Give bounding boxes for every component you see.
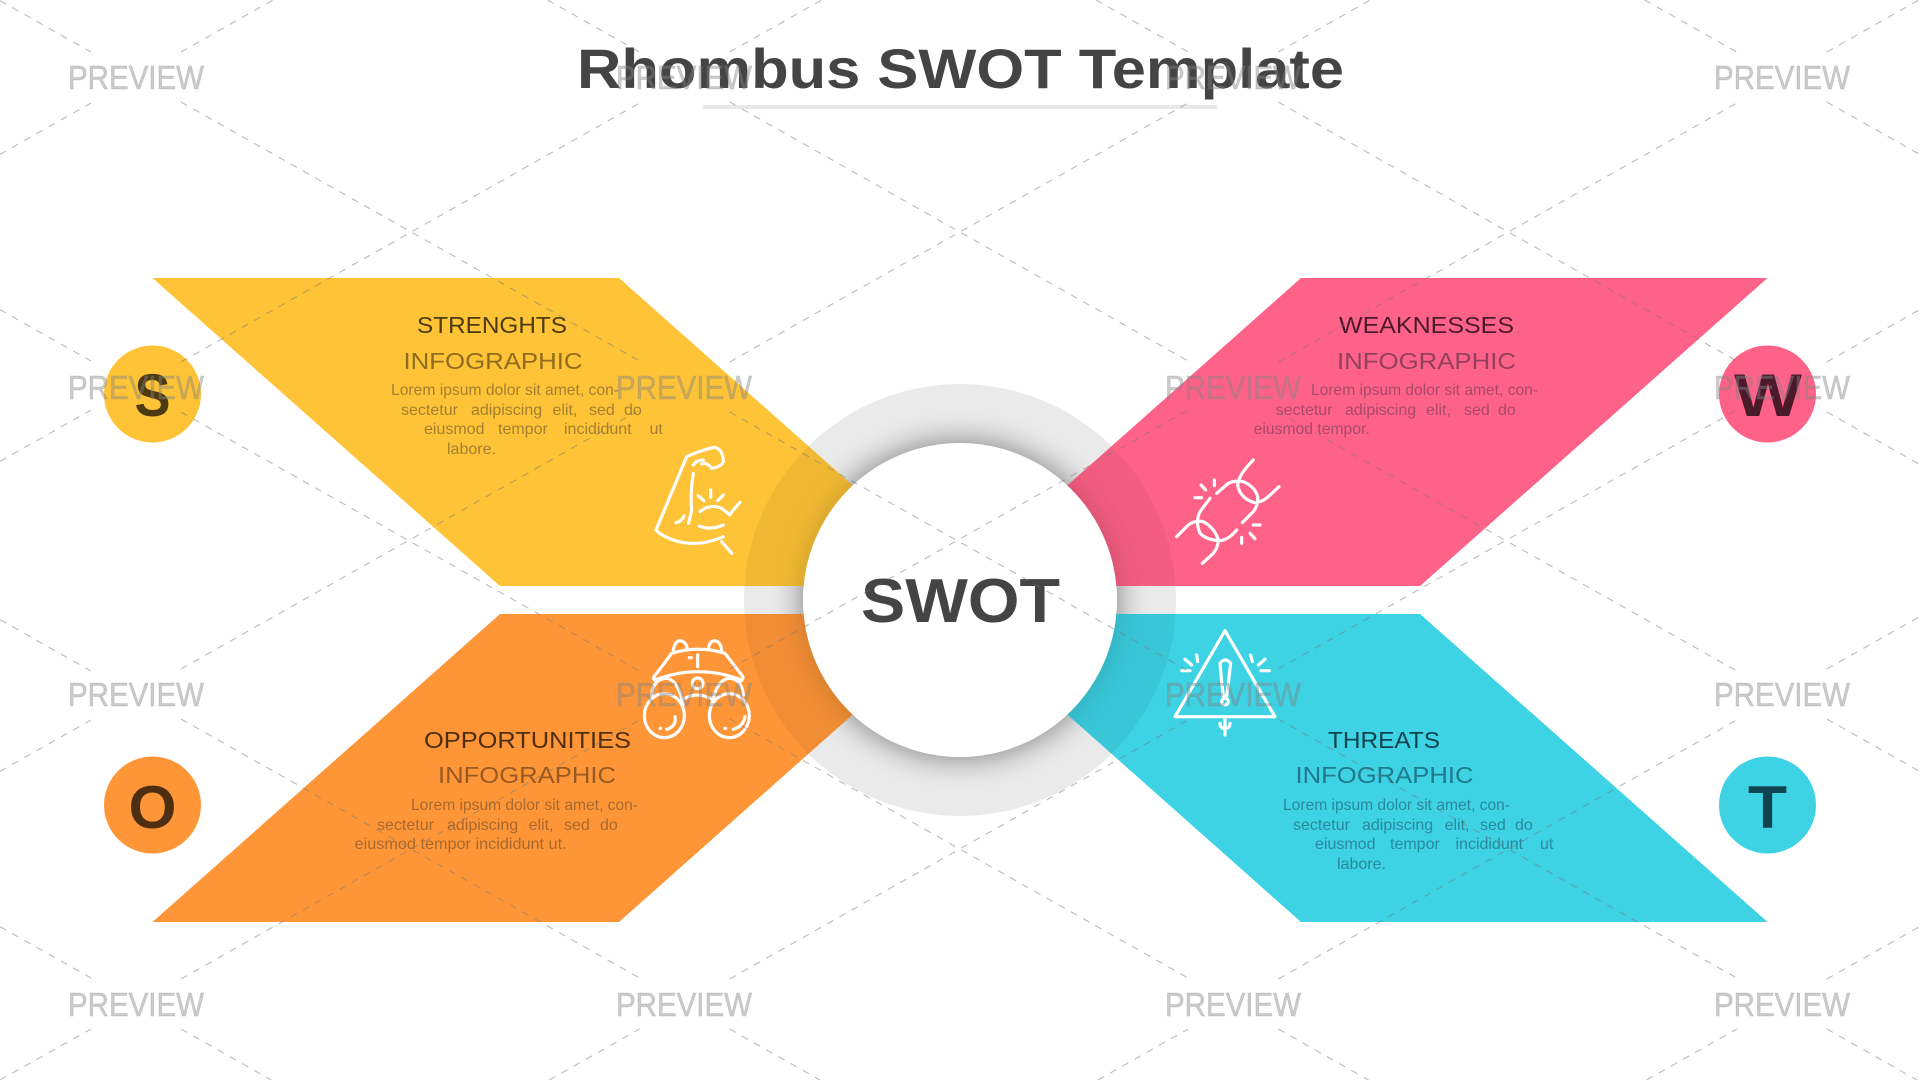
body text: threats: eiusmod xyxy=(1315,836,1375,853)
panel: weaknesses xyxy=(954,278,1768,586)
body text: strengths: ut xyxy=(650,421,663,438)
watermark labels: PREVIEW xyxy=(1714,676,1851,713)
watermark labels: PREVIEW xyxy=(68,676,205,713)
watermark labels: PREVIEW xyxy=(616,369,753,406)
body text: strengths: eiusmod xyxy=(424,421,484,438)
watermark labels: PREVIEW xyxy=(1165,59,1302,96)
watermark labels: PREVIEW xyxy=(68,59,205,96)
body text: threats: sectetur xyxy=(1293,817,1351,834)
watermark labels: PREVIEW xyxy=(1165,986,1302,1023)
heading: weaknesses: WEAKNESSES xyxy=(1339,312,1514,338)
body text: strengths: elit, xyxy=(552,402,577,419)
panel: opportunities xyxy=(152,614,966,922)
badge: W: W xyxy=(1734,362,1802,429)
body text: strengths: adipiscing xyxy=(471,402,542,419)
body text: threats: incididunt xyxy=(1456,836,1524,853)
heading: strengths: STRENGHTS xyxy=(417,312,567,338)
body text: threats: do xyxy=(1515,817,1533,834)
icon: binoculars xyxy=(644,641,749,738)
icon: flexed arm xyxy=(656,447,740,553)
body text: strengths: sed xyxy=(589,402,615,419)
watermark labels: PREVIEW xyxy=(1714,986,1851,1023)
body text: strengths: labore. xyxy=(447,441,496,458)
body text: opportunities: sed xyxy=(564,817,590,834)
watermark labels: PREVIEW xyxy=(1165,676,1302,713)
subheading: threats: INFOGRAPHIC xyxy=(1296,762,1474,788)
badge: O xyxy=(104,756,201,854)
panel: strengths xyxy=(152,278,966,586)
body text: weaknesses: sectetur xyxy=(1276,402,1333,419)
title: Rhombus SWOT Template xyxy=(577,37,1344,100)
body text: strengths: tempor xyxy=(498,421,548,438)
body text: threats: adipiscing xyxy=(1362,817,1433,834)
watermark labels: PREVIEW xyxy=(1714,369,1851,406)
watermark labels: PREVIEW xyxy=(68,369,205,406)
body text: threats: ut xyxy=(1540,836,1554,853)
heading: threats: THREATS xyxy=(1328,727,1440,753)
body text: threats: Lorem ipsum dolor sit amet, con- xyxy=(1283,797,1510,814)
ring around centre xyxy=(744,384,1176,816)
badge: S xyxy=(104,346,201,442)
heading: opportunities: OPPORTUNITIES xyxy=(424,727,631,753)
panel: threats xyxy=(954,614,1768,922)
watermark labels: PREVIEW xyxy=(1165,369,1302,406)
watermark labels: PREVIEW xyxy=(616,986,753,1023)
body text: weaknesses xyxy=(1254,382,1538,438)
body text: threats: elit, xyxy=(1445,817,1470,834)
badge: O: O xyxy=(128,774,176,841)
body text: weaknesses: sed xyxy=(1464,402,1490,419)
body text: opportunities: Lorem ipsum dolor sit amet, con- xyxy=(411,797,638,814)
subheading: weaknesses: INFOGRAPHIC xyxy=(1337,348,1516,374)
body text: opportunities: adipiscing xyxy=(447,817,518,834)
centre label: SWOT xyxy=(861,567,1060,636)
ring base behind panels xyxy=(744,384,1176,816)
badge: W xyxy=(1719,346,1816,442)
body text: opportunities: sectetur xyxy=(377,817,435,834)
icon: broken chain xyxy=(1177,460,1279,563)
body text: strengths: Lorem ipsum dolor sit amet, con- xyxy=(391,382,619,399)
body text: threats: labore. xyxy=(1337,856,1386,873)
centre circle xyxy=(803,443,1117,757)
body text: strengths: do xyxy=(624,402,642,419)
subheading: opportunities: INFOGRAPHIC xyxy=(438,762,616,788)
body text: weaknesses: adipiscing xyxy=(1345,402,1416,419)
body text: opportunities: do xyxy=(600,817,618,834)
body text: weaknesses: elit, xyxy=(1426,402,1451,419)
body text: threats xyxy=(1283,797,1554,873)
body text: opportunities: elit, xyxy=(529,817,554,834)
body text: strengths: sectetur xyxy=(401,402,459,419)
badge: S: S xyxy=(134,362,170,429)
watermark labels: PREVIEW xyxy=(616,676,753,713)
badge: T: T xyxy=(1748,774,1787,841)
body text: weaknesses: do xyxy=(1498,402,1516,419)
body text: threats: tempor xyxy=(1390,836,1440,853)
body text: threats: sed xyxy=(1480,817,1506,834)
body text: weaknesses: Lorem ipsum dolor sit amet, con- xyxy=(1311,382,1538,399)
watermark labels: PREVIEW xyxy=(1714,59,1851,96)
icon: warning triangle xyxy=(1175,631,1275,735)
body text: opportunities xyxy=(355,797,638,853)
watermark labels: PREVIEW xyxy=(68,986,205,1023)
watermark labels: PREVIEW xyxy=(616,59,753,96)
body text: opportunities: eiusmod tempor incididunt ut. xyxy=(355,836,567,853)
body text: strengths: incididunt xyxy=(564,421,632,438)
subheading: strengths: INFOGRAPHIC xyxy=(404,348,582,374)
body text: weaknesses: eiusmod tempor. xyxy=(1254,421,1370,438)
body text: strengths xyxy=(391,382,663,458)
badge: T xyxy=(1719,756,1816,854)
centre shadow behind panels xyxy=(803,443,1117,757)
